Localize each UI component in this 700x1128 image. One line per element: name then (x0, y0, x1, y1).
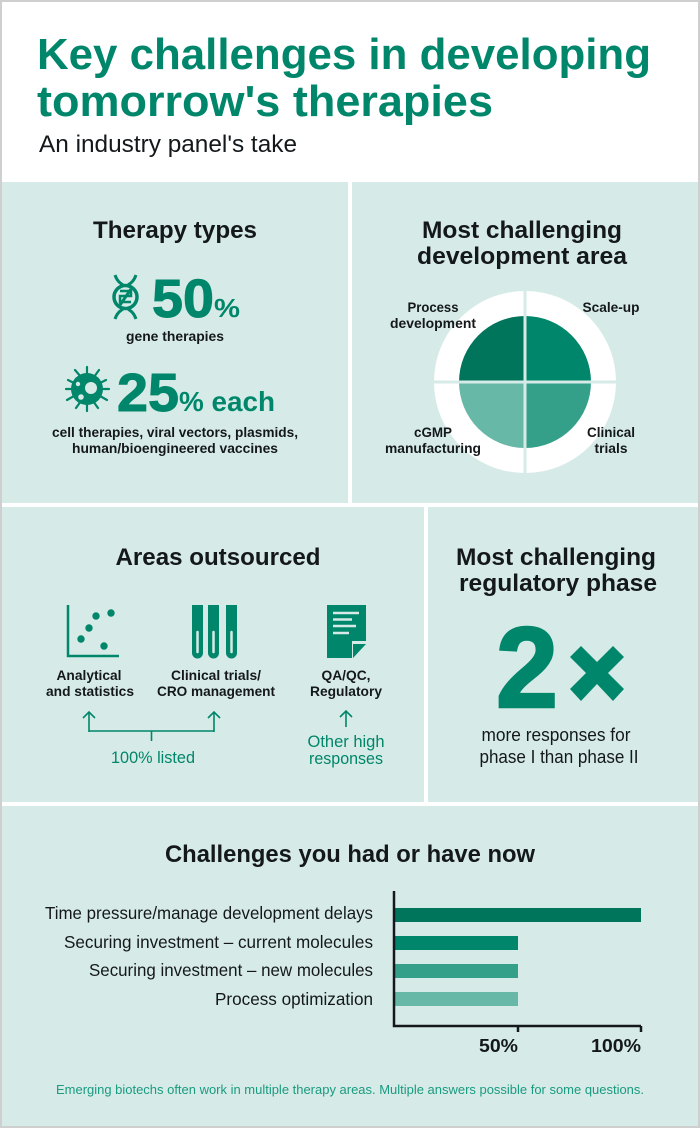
chart: quadrant pie (432, 289, 618, 475)
panel: development area (352, 182, 698, 503)
label: clinical trials: trials (594, 440, 628, 456)
stat: 50%: 50 (152, 269, 214, 329)
arrow: bracket 100% listed (83, 712, 220, 741)
label: clinical trials / CRO: Clinical trials/ (171, 667, 261, 683)
icon: scatter plot (68, 605, 119, 656)
label: therapy list: human/bioengineered vaccines (72, 440, 278, 456)
label: more responses: more responses for (482, 725, 630, 745)
title: tomorrow's therapies (37, 77, 493, 126)
label: QA/QC regulatory (310, 667, 382, 699)
bar labels: Securing investment – current molecules (64, 932, 373, 952)
heading: regulatory phase (456, 544, 657, 597)
label: more responses: phase I than phase II (480, 747, 638, 767)
panel: therapy types: % (214, 293, 240, 323)
label: clinical trials: Clinical (587, 424, 635, 440)
label: analytical and statistics: and statistics (46, 683, 134, 699)
heading: areas outsourced: Areas outsourced (116, 544, 320, 571)
title: Key challenges in developing (37, 30, 651, 79)
label: analytical and statistics: Analytical (56, 667, 122, 683)
bar chart (394, 891, 641, 1032)
stat: 2x: 2 (496, 605, 558, 732)
label: QA/QC regulatory: QA/QC, (322, 667, 370, 683)
label: more responses (480, 725, 638, 767)
label: scale-up: Scale-up (582, 299, 640, 315)
label: clinical trials (587, 424, 635, 456)
label: cGMP manufacturing: manufacturing (385, 440, 481, 456)
heading: development area: development area (417, 243, 628, 270)
icon: virus (66, 367, 109, 411)
bar labels: Securing investment – new molecules (89, 960, 373, 980)
heading: development area (417, 217, 628, 270)
bar labels: Process optimization (215, 989, 373, 1009)
heading: therapy types: Therapy types (93, 217, 257, 244)
label: other high responses: responses (309, 749, 383, 768)
label: cGMP manufacturing: cGMP (414, 424, 452, 440)
label: therapy list (52, 424, 298, 456)
axis labels: 100% (591, 1035, 641, 1056)
title (37, 30, 651, 126)
label: process development (390, 299, 476, 331)
heading: development area: Most challenging (422, 217, 622, 244)
label: process development: Process (408, 299, 459, 315)
stat: 2x (496, 605, 624, 732)
heading: challenges: Challenges you had or have now (165, 841, 535, 868)
label: clinical trials / CRO (157, 667, 275, 699)
subtitle: An industry panel's take (39, 131, 297, 158)
panel: therapy types (2, 182, 348, 503)
axis labels (479, 1035, 641, 1056)
heading: regulatory phase: regulatory phase (459, 570, 657, 597)
panel: regulatory phase (428, 507, 698, 802)
label: therapy list: cell therapies, viral vectors, plasmids, (52, 424, 298, 440)
panel: challenges (2, 806, 698, 1126)
label: QA/QC regulatory: Regulatory (310, 683, 382, 699)
label: 100% listed: 100% listed (111, 748, 195, 767)
bar labels: Time pressure/manage development delays (45, 903, 373, 923)
label: gene therapies: gene therapies (126, 328, 224, 344)
label: other high responses: Other high (308, 732, 384, 751)
bar labels (45, 903, 373, 1009)
icon: document (327, 605, 366, 658)
axis labels: 50% (479, 1035, 518, 1056)
arrow: other high responses (340, 711, 352, 727)
footnote: Emerging biotechs often work in multiple therapy areas. Multiple answers possible for some questions. (56, 1082, 644, 1097)
label: other high responses (308, 732, 384, 768)
icon: DNA helix (114, 275, 137, 319)
panel: therapy types: % each (179, 386, 275, 417)
label: process development: development (390, 315, 476, 331)
icon: test tubes (192, 605, 237, 659)
heading: regulatory phase: Most challenging (456, 544, 656, 571)
label: cGMP manufacturing (385, 424, 481, 456)
label: analytical and statistics (46, 667, 134, 699)
stat: 25% each: 25 (117, 363, 179, 423)
panel: areas outsourced (2, 507, 424, 802)
label: clinical trials / CRO: CRO management (157, 683, 275, 699)
